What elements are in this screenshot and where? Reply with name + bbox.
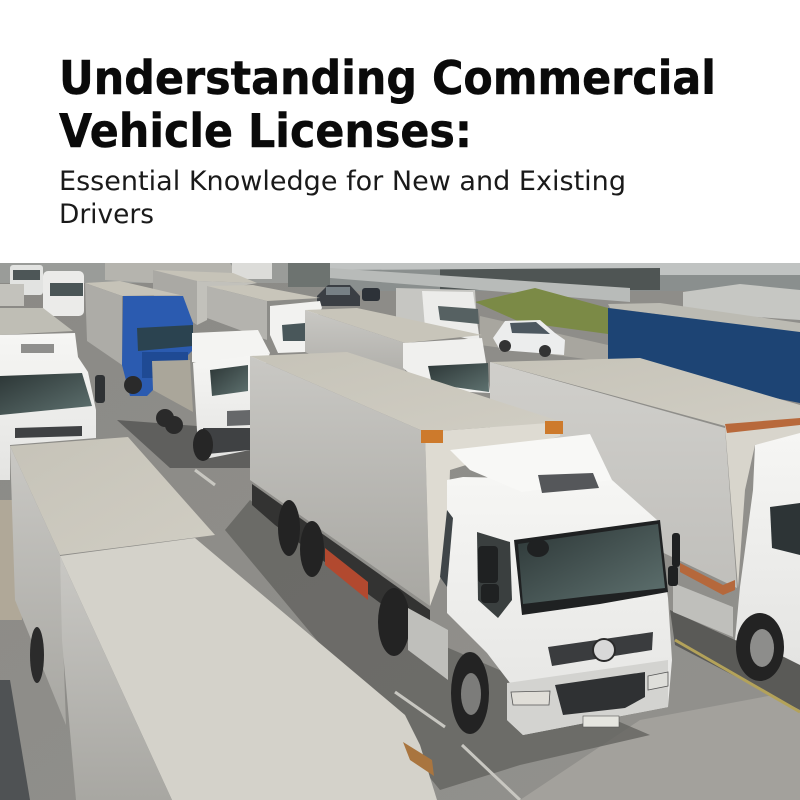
lower bumper xyxy=(507,660,668,735)
white parked car xyxy=(493,320,565,357)
trailer roof xyxy=(250,352,562,432)
plate xyxy=(583,716,619,727)
road surface xyxy=(0,263,800,800)
side stripe xyxy=(440,510,453,587)
heading line 1: Understanding Commercial xyxy=(59,51,716,105)
sandy verge, lower left xyxy=(0,500,22,620)
roof hatch xyxy=(538,473,599,493)
wheel xyxy=(736,613,784,681)
lane markings xyxy=(195,470,520,800)
trailer side xyxy=(490,362,737,588)
truck: right white xyxy=(490,358,800,681)
subtitle line 2: Drivers xyxy=(59,199,154,230)
truck: blue cab xyxy=(85,281,193,396)
planted median xyxy=(475,288,608,334)
cab body xyxy=(447,477,672,735)
tanks xyxy=(408,608,448,680)
mirrors xyxy=(478,533,680,603)
heading line 2: Vehicle Licenses: xyxy=(59,104,472,158)
amber corner markers xyxy=(421,421,563,443)
sunlit road, lower right xyxy=(520,690,800,800)
front wheel xyxy=(451,652,489,734)
distant vans xyxy=(0,263,272,316)
windshield surround xyxy=(514,520,668,615)
truck: centre white with flatbed xyxy=(152,330,270,461)
red side guard xyxy=(325,548,368,600)
subtitle line 1: Essential Knowledge for New and Existing xyxy=(59,166,626,197)
side door window xyxy=(477,532,512,618)
yellow lane line xyxy=(675,640,800,712)
truck: left white cab xyxy=(0,308,105,480)
windshield xyxy=(518,524,665,604)
background buildings xyxy=(0,263,800,320)
lower grille xyxy=(555,672,645,715)
cab xyxy=(735,433,800,665)
grille xyxy=(548,632,653,666)
dark parked car xyxy=(317,285,380,306)
shadow under centre truck xyxy=(117,420,250,468)
headlamps xyxy=(511,691,550,705)
tanks xyxy=(673,583,733,637)
cab window xyxy=(770,503,800,555)
trailer: lower left front xyxy=(60,538,437,800)
trailer: lower left rear xyxy=(10,437,215,725)
trailer side xyxy=(250,356,430,606)
rear wheels xyxy=(278,500,410,656)
trailer roof xyxy=(490,358,800,426)
truck: far centre white xyxy=(396,288,480,342)
orange sill xyxy=(680,563,735,595)
navy container xyxy=(608,303,800,403)
truck: main white Mercedes xyxy=(250,352,680,735)
shadow between main and right trucks xyxy=(670,610,800,710)
roof trim xyxy=(725,418,800,433)
shadow under main truck xyxy=(225,500,650,790)
title block xyxy=(59,51,716,230)
truck: beige trailer behind blue xyxy=(153,270,257,325)
roof deflector xyxy=(450,434,612,492)
photo: truck fleet on a depot road xyxy=(0,263,800,800)
road edge kerb xyxy=(480,316,608,362)
truck: white, upper centre xyxy=(207,285,322,353)
trailer front face xyxy=(425,422,562,606)
dark kerb, lower left xyxy=(0,680,30,800)
badge xyxy=(593,639,615,661)
chassis xyxy=(252,484,430,640)
trailer front face xyxy=(725,420,800,588)
truck: white, centre top xyxy=(305,308,490,395)
